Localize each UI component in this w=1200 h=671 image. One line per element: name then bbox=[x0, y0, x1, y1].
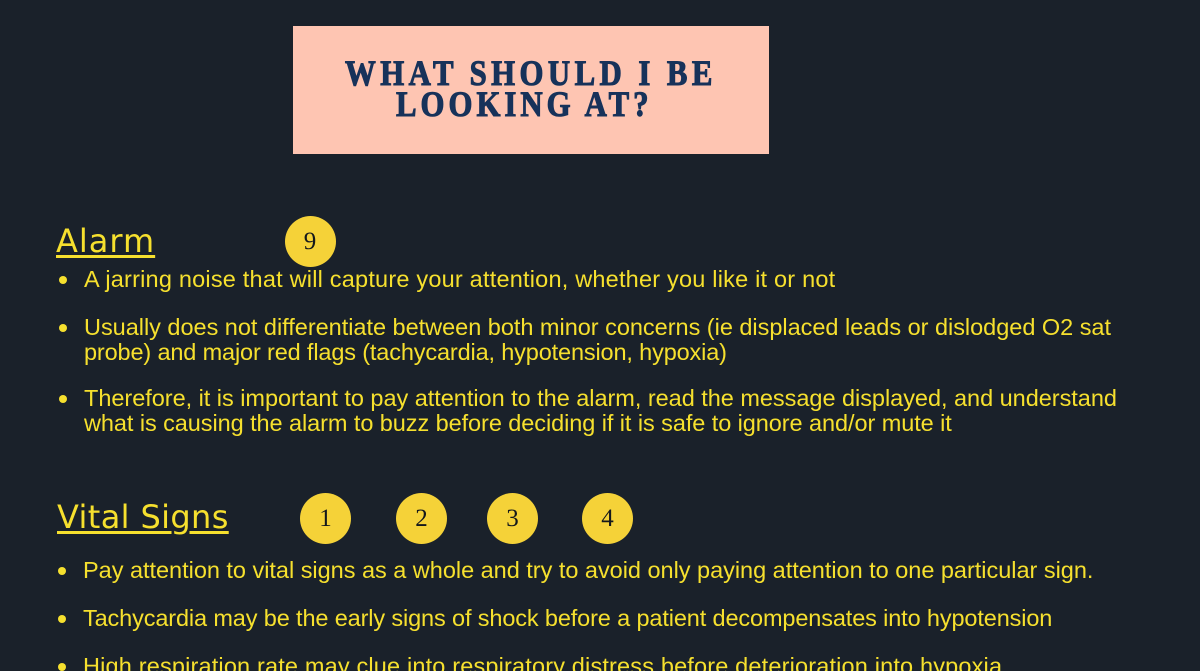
list: vital signs bullets bbox=[58, 557, 1093, 671]
list: alarm bullets: Usually does not differentiate between both minor concerns (ie displaced leads or dislodged O2 sat bbox=[84, 314, 1111, 340]
badge: 3: 3 bbox=[506, 505, 519, 532]
badge: 9 bbox=[285, 216, 336, 267]
heading: Alarm: Alarm bbox=[56, 222, 155, 260]
title: WHAT SHOULD I BE bbox=[345, 53, 717, 93]
heading: Vital Signs: Vital Signs bbox=[57, 498, 229, 536]
title bbox=[344, 53, 717, 124]
list: alarm bullets: what is causing the alarm to buzz before deciding if it is safe to ignore and/or mute it bbox=[84, 410, 952, 436]
list: alarm bullets: probe) and major red flags (tachycardia, hypotension, hypoxia) bbox=[84, 339, 727, 365]
badge: 9: 9 bbox=[304, 228, 316, 255]
badge: 3 bbox=[487, 493, 538, 544]
list: alarm bullets bbox=[59, 266, 1117, 436]
title: LOOKING AT? bbox=[396, 84, 653, 124]
badge: 1: 1 bbox=[319, 505, 332, 532]
title banner bbox=[293, 26, 769, 154]
badge: 4: 4 bbox=[601, 505, 614, 532]
badge: 1 bbox=[300, 493, 351, 544]
list: alarm bullets: A jarring noise that will capture your attention, whether you like it or not bbox=[84, 266, 835, 292]
badge: 2 bbox=[396, 493, 447, 544]
list: vital signs bullets: Pay attention to vital signs as a whole and try to avoid only paying attention to one particular sign. bbox=[83, 557, 1093, 583]
list: alarm bullets: Therefore, it is important to pay attention to the alarm, read the message displayed, and understand bbox=[84, 385, 1117, 411]
badge: 2: 2 bbox=[415, 505, 428, 532]
list: vital signs bullets: Tachycardia may be the early signs of shock before a patient decompensates into hypotension bbox=[83, 605, 1052, 631]
badge: 4 bbox=[582, 493, 633, 544]
